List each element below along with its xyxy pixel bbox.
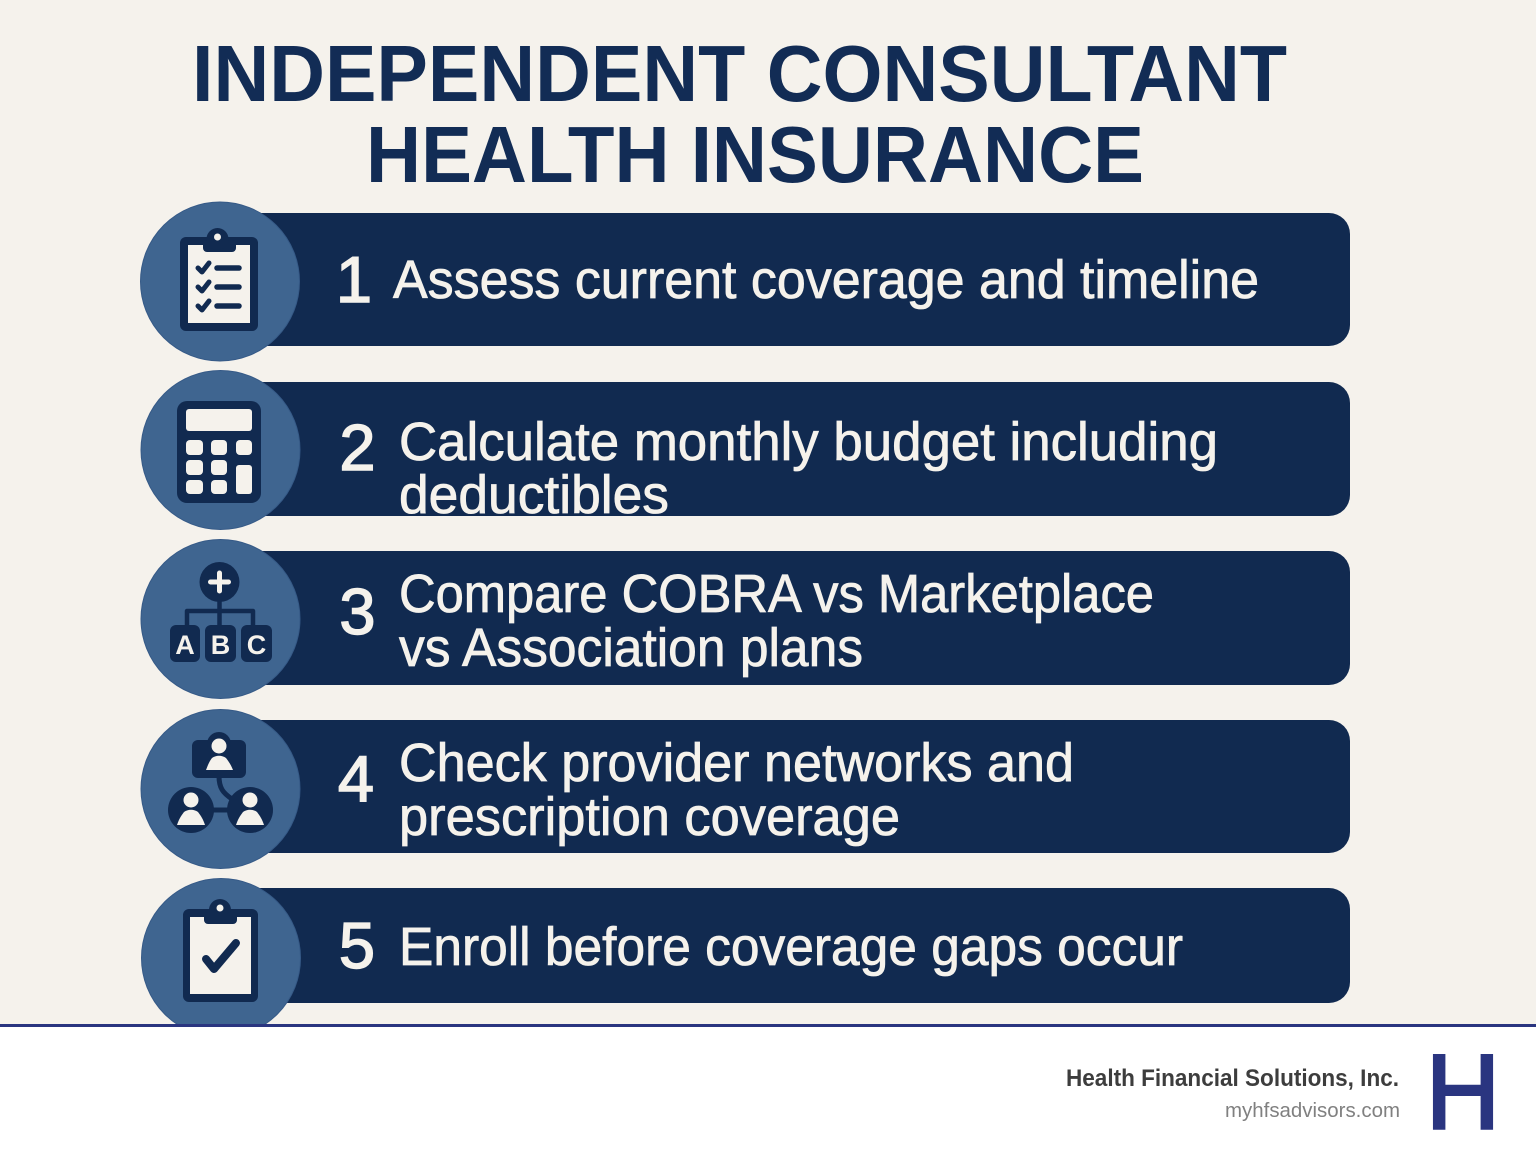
step 4 text [399, 733, 1074, 847]
title: INDEPENDENT CONSULTANT [192, 29, 1287, 118]
icon: plan options tree: B [211, 630, 230, 660]
icon: plan options tree: C [247, 630, 266, 660]
step 5 text: Enroll before coverage gaps occur [399, 917, 1183, 977]
step 5 icon circle [142, 878, 300, 1038]
step 2 text: Calculate monthly budget including [399, 412, 1218, 472]
step 3 icon circle [141, 540, 300, 698]
logo letter H: H [1426, 1034, 1500, 1152]
step 4 text: Check provider networks and [399, 733, 1074, 793]
step 5 bar [240, 888, 1350, 1003]
title: HEALTH INSURANCE [366, 110, 1144, 199]
panel: step 2 [141, 370, 1350, 530]
company name: Health Financial Solutions, Inc. [1066, 1065, 1399, 1092]
step 1 bar [240, 213, 1350, 346]
icon: plan options tree: A [175, 630, 195, 660]
step 2 text: deductibles [399, 465, 669, 525]
step 3 bar [240, 551, 1350, 685]
step 3 text [399, 564, 1154, 678]
panel: step 3 [141, 540, 1350, 698]
step 2 text [399, 412, 1218, 525]
step 2 icon circle [141, 370, 300, 530]
icon: plan options tree [170, 562, 272, 662]
step 4 icon circle [141, 710, 300, 868]
step 3 text: vs Association plans [399, 618, 863, 678]
step 4 number: 4 [338, 742, 374, 815]
icon: calculator [177, 401, 261, 503]
icon: checklist clipboard [180, 228, 258, 331]
step 1 number: 1 [336, 243, 372, 316]
step 2 number: 2 [339, 411, 376, 484]
step 3 number: 3 [339, 575, 376, 648]
footer panel [0, 1024, 1536, 1154]
panel: step 4 [141, 710, 1350, 868]
title [192, 29, 1287, 199]
icon: clipboard with check [183, 899, 258, 1002]
step 5 number: 5 [339, 909, 375, 982]
website: myhfsadvisors.com [1225, 1100, 1400, 1122]
panel: step 1 [140, 202, 1350, 361]
icon: provider network [168, 732, 273, 833]
panel: step 5 [142, 878, 1350, 1038]
step 3 text: Compare COBRA vs Marketplace [399, 564, 1154, 624]
step 4 bar [240, 720, 1350, 853]
step 4 text: prescription coverage [399, 787, 900, 847]
step 2 bar [240, 382, 1350, 516]
step 1 icon circle [140, 202, 300, 361]
step 1 text: Assess current coverage and timeline [393, 250, 1259, 310]
